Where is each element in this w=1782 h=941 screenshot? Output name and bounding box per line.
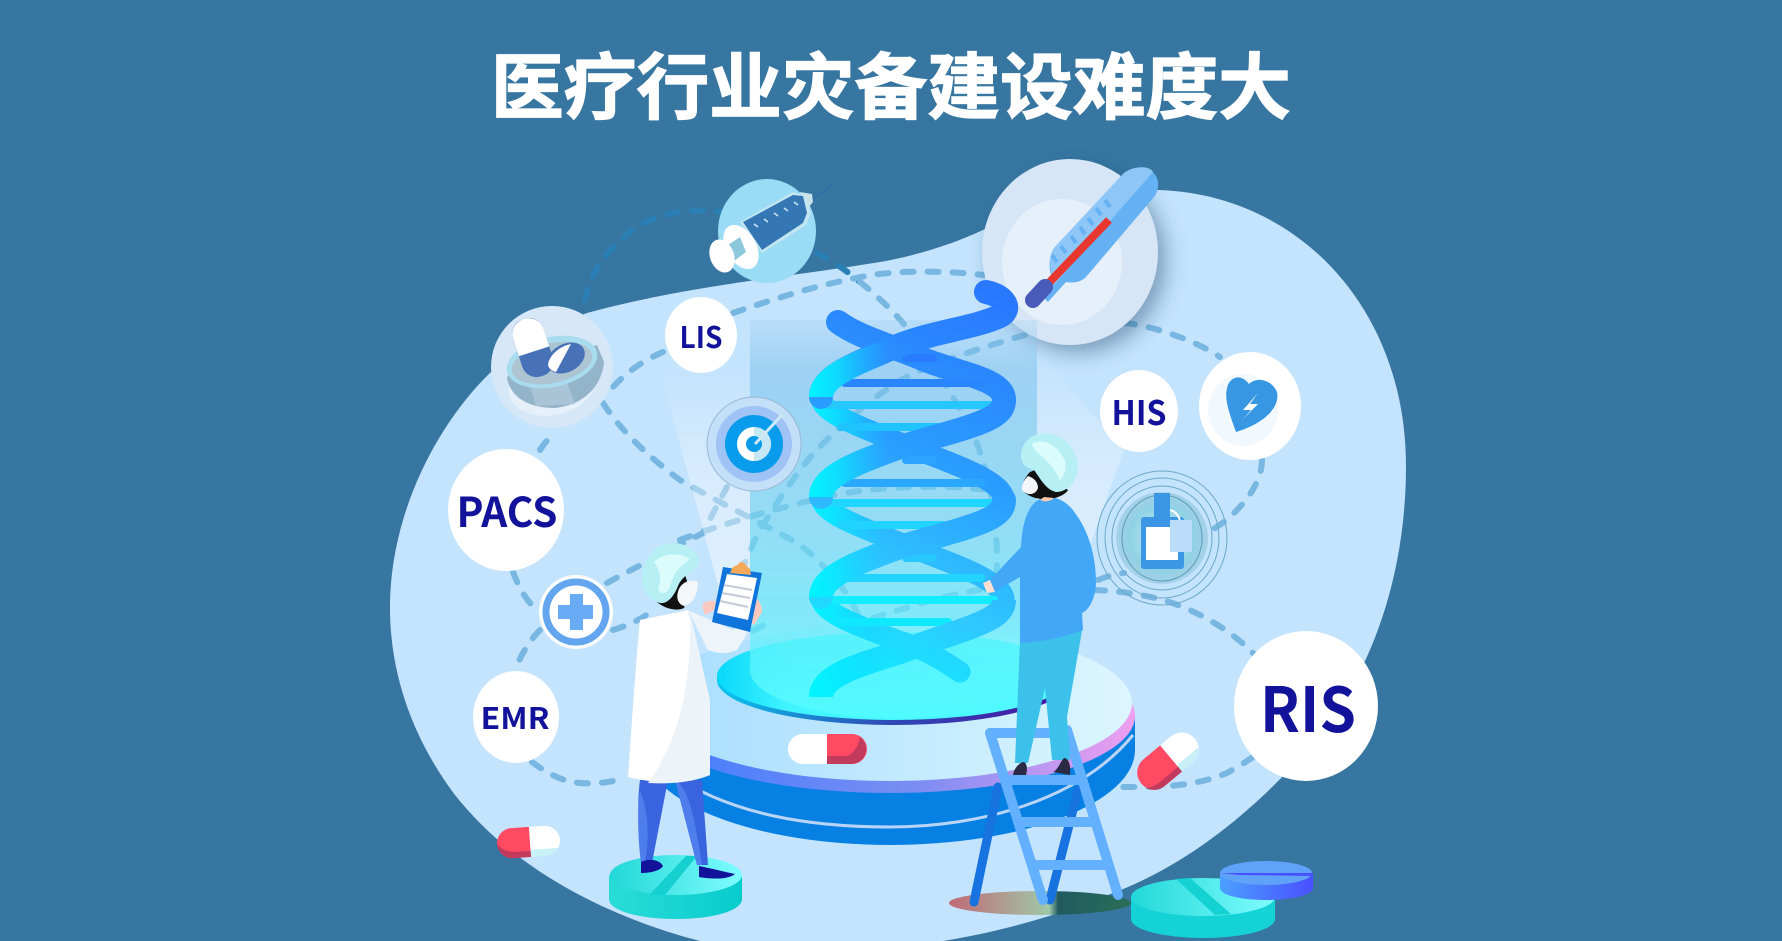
clipboard bbox=[712, 562, 762, 632]
technician face and hair bbox=[1022, 468, 1068, 499]
icon: medicine bottle bbox=[1097, 471, 1227, 605]
label: EMR bbox=[473, 671, 559, 763]
label: PACS bbox=[448, 449, 564, 571]
front strands bbox=[821, 292, 1006, 697]
small blue tablet bbox=[1220, 861, 1313, 900]
icon: heart bbox=[1199, 352, 1301, 460]
pill: left bbox=[496, 825, 561, 859]
icon: syringe bbox=[705, 179, 835, 283]
label: RIS bbox=[1234, 631, 1378, 781]
label: HIS: HIS bbox=[1112, 386, 1166, 435]
back strands bbox=[821, 322, 1004, 672]
rungs bbox=[830, 358, 994, 622]
icon: pill bowl bbox=[491, 306, 613, 428]
big tablet bbox=[1131, 878, 1275, 938]
label: PACS: PACS bbox=[456, 479, 558, 539]
light beams bbox=[660, 350, 1124, 640]
label: LIS: LIS bbox=[680, 313, 722, 357]
label: LIS bbox=[665, 297, 737, 373]
front strand cyan shading bbox=[821, 347, 900, 697]
pill: platform bbox=[788, 734, 867, 764]
pill: right bbox=[1130, 725, 1206, 797]
backdrop blob bbox=[390, 190, 1406, 941]
person: doctor bbox=[628, 543, 762, 879]
ladder shadow bbox=[949, 891, 1131, 915]
ladder bbox=[974, 730, 1118, 902]
tablet under doctor bbox=[609, 855, 742, 919]
thermometer ticks bbox=[1052, 200, 1110, 262]
back strand cyan shading bbox=[821, 397, 910, 645]
title: 医疗行业灾备建设难度大 bbox=[491, 29, 1291, 134]
doctor hairnet bbox=[642, 543, 699, 603]
icon: plus badge bbox=[539, 575, 613, 649]
label: HIS bbox=[1100, 370, 1178, 452]
doctor face and hair bbox=[655, 572, 690, 610]
label: EMR: EMR bbox=[480, 694, 550, 738]
DNA helix bbox=[821, 292, 1006, 697]
person: right technician bbox=[983, 433, 1096, 775]
technician hairnet bbox=[1021, 433, 1078, 492]
glass cylinder bbox=[750, 320, 1037, 718]
thermometer badge bbox=[982, 159, 1158, 345]
icon: target bbox=[707, 397, 801, 491]
platform bbox=[645, 625, 1135, 845]
cyan base disc bbox=[717, 635, 1071, 725]
dashed network links bbox=[513, 211, 1262, 787]
label: RIS: RIS bbox=[1260, 660, 1356, 750]
